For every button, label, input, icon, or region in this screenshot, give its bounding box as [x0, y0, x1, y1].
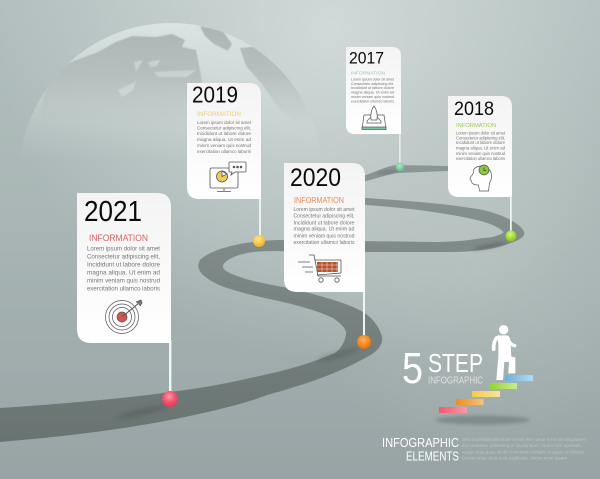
milestone 2019 [187, 82, 265, 247]
description text: beatae vitae dicta sunt explicabo. Nemo enim ipsam [462, 456, 567, 462]
globe [27, 23, 299, 130]
ball shadows [116, 169, 507, 421]
icon: target [106, 300, 142, 334]
body 2019: Consectetur adipiscing elit, [197, 126, 251, 132]
body 2018: magna aliqua. Ut enim ad [456, 145, 505, 150]
body 2017: minim veniam quis nostrud [351, 94, 394, 99]
body 2017: exercitation ullamco laboris [351, 98, 394, 104]
heading 2019: INFORMATION [197, 111, 241, 118]
ball 2018 [506, 230, 516, 242]
milestone 2021 [77, 193, 178, 407]
card 2019 [187, 83, 261, 199]
ball 2017 [396, 162, 404, 172]
body 2018: Lorem ipsum dolor sit amet [456, 131, 506, 136]
body 2020: exercitation ullamco laboris [294, 240, 355, 246]
ball 2019 [253, 235, 265, 247]
heading 2020: INFORMATION [294, 196, 344, 205]
icon: head with clock [470, 165, 492, 191]
title: infographic elements: INFOGRAPHIC [382, 436, 459, 450]
year 2017: 2017 [349, 48, 384, 68]
title: 5 step infographic: STEP [428, 348, 483, 378]
body 2021: Lorem ipsum dolor sit amet [87, 246, 160, 252]
card 2017 [346, 47, 401, 134]
road [0, 165, 524, 442]
body 2018 [456, 131, 506, 161]
body 2020: Incididunt ut labore dolore [294, 220, 354, 226]
body 2018: minim veniam quis nostrud [456, 151, 505, 156]
pole 2018 [510, 195, 512, 232]
body 2017: Incididunt ut labore dolore [351, 85, 394, 90]
body 2018: Consectetur adipiscing elit, [456, 135, 505, 140]
pole 2017 [399, 132, 401, 164]
milestone 2017 [346, 47, 404, 172]
title: 5 step infographic [402, 344, 483, 393]
title: 5 step infographic: INFOGRAPHIC [428, 376, 483, 386]
body 2017 [351, 76, 395, 104]
description text: Sed ut perspiciatis unde omnis iste natus error sit voluptatem [462, 437, 586, 443]
body 2017: Lorem ipsum dolor sit amet [351, 76, 395, 82]
stairs [439, 375, 533, 413]
body 2021: Incididunt ut labore dolore [87, 262, 160, 268]
icon: monitor with chat [210, 162, 246, 192]
heading 2018: INFORMATION [456, 123, 496, 129]
body 2019: magna aliqua. Ut enim ad [197, 137, 251, 143]
card 2018 [448, 96, 512, 197]
body 2018: exercitation ullamco laboris [456, 156, 506, 161]
pole 2020 [363, 290, 365, 338]
heading 2021: INFORMATION [89, 233, 148, 243]
body 2020: Consectetur adipiscing elit, [294, 214, 355, 220]
year 2018: 2018 [454, 98, 494, 120]
body 2021 [87, 246, 161, 292]
body 2017: Consectetur adipiscing elit, [351, 81, 394, 86]
icon: shopping cart [298, 255, 341, 282]
body 2019: minim veniam quis nostrud [197, 143, 251, 149]
year 2021: 2021 [84, 196, 142, 228]
body 2020: magna aliqua. Ut enim ad [294, 227, 354, 233]
body 2018: Incididunt ut labore dolore [456, 140, 505, 145]
body 2020 [294, 207, 355, 246]
icon: climbing figure [494, 325, 515, 380]
pole 2021 [169, 340, 171, 395]
year 2019: 2019 [192, 82, 238, 108]
body 2021: minim veniam quis nostrud [87, 278, 160, 284]
body 2019: Lorem ipsum dolor sit amet [197, 120, 252, 126]
description text: eaque ipsa quae ab illo inventore veritatis et quasi architecto [462, 450, 584, 456]
body 2019 [197, 120, 252, 155]
ball 2021 [162, 391, 178, 407]
milestone 2018 [448, 96, 516, 242]
ball 2020 [357, 335, 371, 349]
body 2021: exercitation ullamco laboris [87, 286, 161, 292]
body 2019: exercitation ullamco laboris [197, 149, 251, 155]
title: infographic elements [382, 436, 459, 464]
card 2020 [284, 163, 365, 292]
body 2017: magna aliqua. Ut enim ad [351, 90, 394, 94]
body 2021: magna aliqua. Ut enim ad [87, 270, 160, 276]
year 2020: 2020 [290, 164, 341, 192]
heading 2017: INFORMATION [351, 70, 386, 76]
description text: accusantium doloremque laudantium, totam rem aperiam, [462, 443, 582, 449]
pole 2019 [259, 197, 261, 237]
body 2021: Consectetur adipiscing elit, [87, 254, 160, 260]
step shadow [436, 416, 530, 424]
body 2020: Lorem ipsum dolor sit amet [294, 207, 355, 213]
body 2019: Incididunt ut labore dolore [197, 131, 251, 137]
card 2021 [77, 193, 171, 343]
icon: rocket on laptop [362, 106, 386, 130]
description text [462, 437, 586, 462]
body 2020: minim veniam quis nostrud [294, 234, 354, 240]
title: 5 step infographic: 5 [402, 344, 423, 393]
title: infographic elements: ELEMENTS [406, 450, 459, 464]
milestone 2020 [284, 163, 371, 349]
